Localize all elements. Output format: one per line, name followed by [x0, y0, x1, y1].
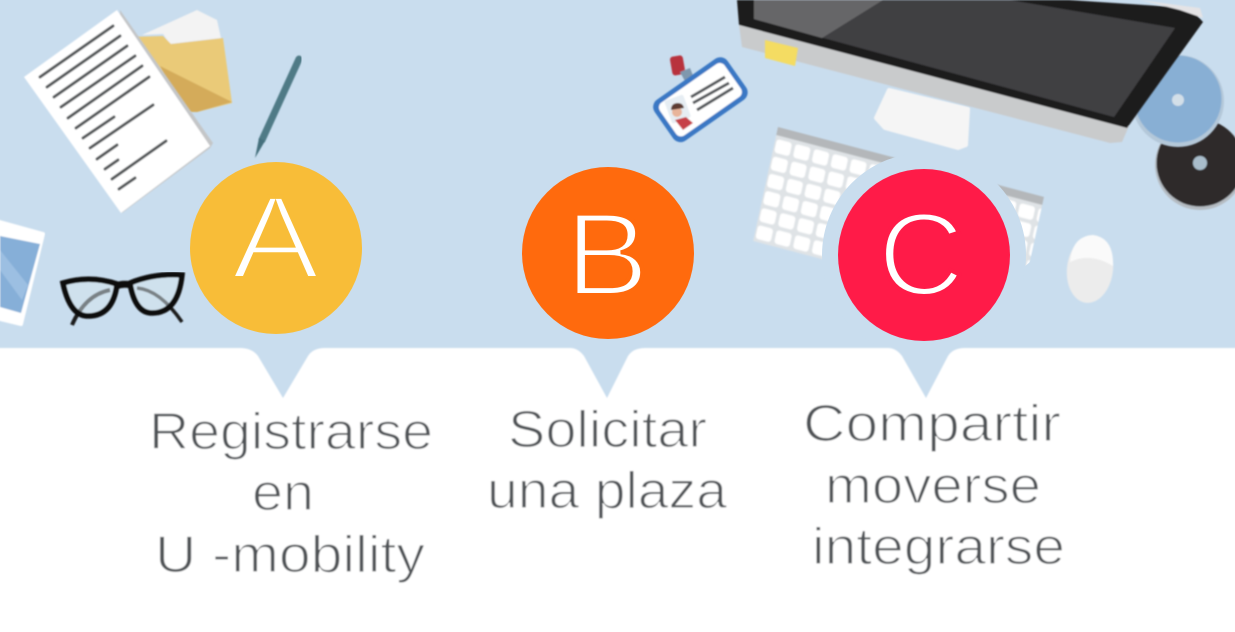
label C text: moverse — [825, 457, 1041, 515]
label B text: una plaza — [487, 462, 727, 520]
step B badge: B — [565, 189, 649, 321]
label C text: Compartir — [803, 395, 1061, 453]
label B text — [487, 401, 727, 520]
step C badge: C — [878, 189, 964, 321]
icon: keyboard — [753, 126, 1044, 266]
label A text — [149, 403, 433, 584]
label A text: en — [252, 464, 314, 522]
icon: mouse — [1063, 232, 1117, 306]
label C text: integrarse — [812, 518, 1065, 576]
step A badge: A — [232, 172, 320, 304]
icon: sticky note — [765, 40, 798, 66]
icon: folder — [130, 10, 232, 112]
icon: black disc — [1155, 120, 1235, 210]
white lower panel with pointers — [0, 348, 1235, 632]
label C text — [803, 395, 1065, 576]
halo around circle C — [822, 153, 1026, 357]
label B text: Solicitar — [508, 401, 707, 459]
label A text: U -mobility — [155, 526, 425, 584]
icon: desktop monitor — [737, 0, 1203, 143]
step B badge — [522, 167, 694, 339]
icon: glasses — [63, 275, 182, 325]
icon: paper document — [24, 10, 213, 213]
step A badge — [190, 162, 362, 334]
label A text: Registrarse — [149, 403, 433, 461]
icon: pen — [255, 59, 299, 158]
icon: monitor stand — [876, 90, 968, 148]
step C badge — [838, 169, 1010, 341]
desk background — [0, 0, 1235, 402]
icon: blue disc — [1132, 55, 1224, 147]
icon: smartphone — [0, 221, 43, 324]
icon: ID badge — [650, 54, 751, 146]
